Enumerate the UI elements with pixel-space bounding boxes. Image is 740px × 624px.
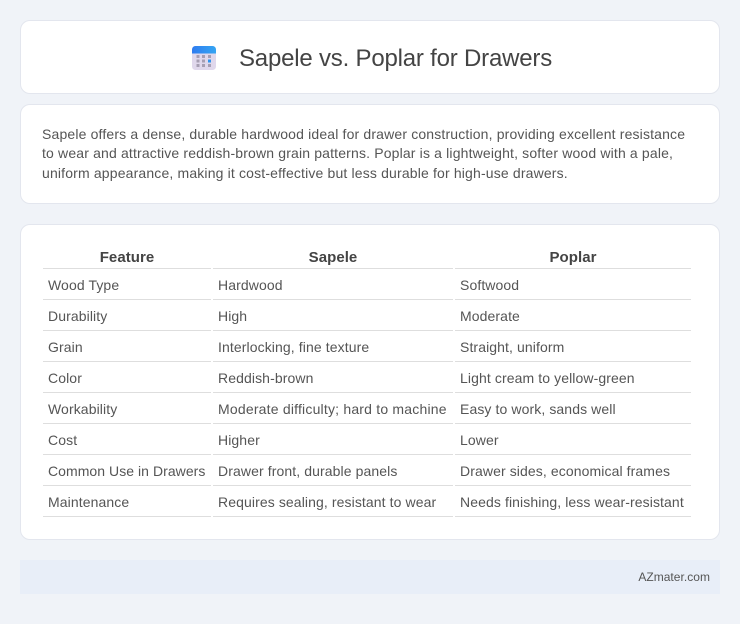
row: color	[43, 370, 691, 393]
row: durability: Durability	[48, 308, 107, 324]
row: common use in drawers	[43, 463, 691, 486]
row: workability: Easy to work, sands well	[460, 401, 616, 417]
row: cost: Lower	[460, 432, 499, 448]
row: cost	[43, 432, 691, 455]
footer credit: AZmater.com	[638, 570, 710, 584]
icon: calendar	[192, 46, 216, 70]
row: maintenance: Needs finishing, less wear-resistant	[460, 494, 684, 510]
row: maintenance	[43, 494, 691, 517]
table header row: Poplar	[550, 249, 596, 266]
row: color: Reddish-brown	[218, 370, 313, 386]
row: maintenance: Requires sealing, resistant to wear	[218, 494, 436, 510]
table header row: Sapele	[309, 249, 357, 266]
row: workability: Moderate difficulty; hard to machine	[218, 401, 447, 417]
intro text panel	[20, 104, 720, 204]
intro paragraph	[42, 126, 685, 181]
row: common use in drawers: Drawer front, durable panels	[218, 463, 397, 479]
row: grain: Grain	[48, 339, 83, 355]
row: durability	[43, 308, 691, 331]
comparison table panel	[20, 224, 720, 540]
row: common use in drawers: Drawer sides, economical frames	[460, 463, 670, 479]
table header row: Feature	[100, 249, 154, 266]
row: workability	[43, 401, 691, 424]
row: color: Color	[48, 370, 82, 386]
row: wood type	[43, 277, 691, 300]
row: cost: Higher	[218, 432, 260, 448]
row: color: Light cream to yellow-green	[460, 370, 635, 386]
intro paragraph: to wear and attractive reddish-brown grain patterns. Poplar is a lightweight, softer wood with a pale,	[42, 145, 673, 161]
row: wood type: Hardwood	[218, 277, 283, 293]
footer bar	[20, 560, 720, 594]
row: wood type: Wood Type	[48, 277, 119, 293]
row: grain	[43, 339, 691, 362]
row: durability: High	[218, 308, 247, 324]
intro paragraph: Sapele offers a dense, durable hardwood ideal for drawer construction, providing excellent resistance	[42, 126, 685, 142]
row: durability: Moderate	[460, 308, 520, 324]
row: cost: Cost	[48, 432, 77, 448]
table header row	[43, 249, 691, 269]
comparison table	[43, 249, 691, 517]
title: Sapele vs. Poplar for Drawers	[239, 45, 552, 72]
row: workability: Workability	[48, 401, 117, 417]
row: grain: Interlocking, fine texture	[218, 339, 369, 355]
row: common use in drawers: Common Use in Drawers	[48, 463, 205, 479]
header card	[20, 20, 720, 94]
row: maintenance: Maintenance	[48, 494, 129, 510]
intro paragraph: uniform appearance, making it cost-effective but less durable for high-use drawers.	[42, 164, 568, 180]
row: wood type: Softwood	[460, 277, 519, 293]
row: grain: Straight, uniform	[460, 339, 564, 355]
